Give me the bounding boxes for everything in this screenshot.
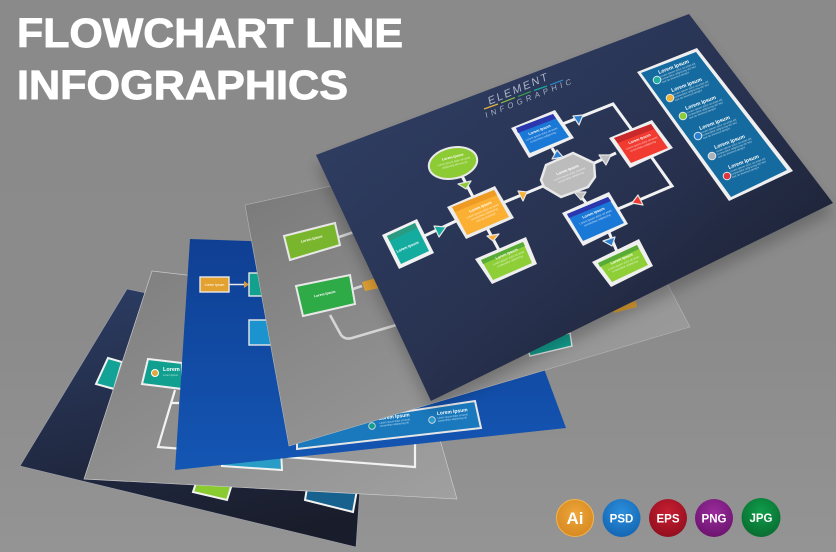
green box lower: Lorem Ipsum [314,290,336,298]
orange box [200,277,229,292]
node: hexagon: Lorem Ipsum [556,164,580,176]
node: blue box top: consectetur adipiscing [529,130,557,144]
node: green ellipse: Lorem ipsum dolor sit amet [437,155,471,167]
orange box: Lorem Ipsum [205,283,225,287]
sheet 4: grey [245,183,690,446]
icon: PSD: PSD [610,514,633,526]
icon: EPS: EPS [656,514,680,526]
node: orange box [447,186,514,239]
item 4 [694,113,739,140]
connector lines [330,230,420,339]
item 2: Lorem Ipsum [671,77,703,94]
item 4: Lorem ipsum dolor sit amet elit [700,117,737,134]
node: orange box: sed do eiusmod [475,211,496,223]
node: green box right: consectetur adipiscing [611,259,639,273]
icon: PSD [602,499,640,537]
info strip: Lorem Ipsum [379,412,411,422]
node: green box lower: Lorem ipsum dolor sit amet [492,250,525,267]
item 3 [679,93,725,120]
node: green ellipse: adipiscing elit sed do [442,160,468,170]
teal box [142,359,182,389]
item 1: sed do eiusmod tempor [661,70,690,84]
node: blue box top: Lorem Ipsum [528,124,552,136]
item 2: consectetur adipiscing elit sed [673,82,710,99]
node: hexagon: consectetur adipiscing [557,170,585,184]
icon: PNG: PNG [702,514,727,526]
format icons [556,498,780,537]
sheet 5: main dark flowchart [316,14,833,401]
item 6 [723,152,768,180]
sheet 3: blue [175,239,566,470]
node: teal box [382,219,434,269]
orange box right [612,301,637,313]
node: blue box lower: Lorem Ipsum [582,206,606,220]
node: red box: Lorem ipsum dolor sit amet [625,135,658,151]
item 6: consectetur adipiscing elit sed [730,159,767,176]
node: orange box: Lorem Ipsum [469,200,493,214]
teal box: Lorem [163,367,180,373]
node: green ellipse: Lorem Ipsum [442,152,464,162]
item 6: Lorem ipsum dolor sit amet elit [729,156,766,173]
logo: element infographic: INFOGRAPHIC [485,77,572,120]
node: hexagon: Lorem ipsum dolor sit amet [553,166,586,182]
icon: PNG [695,499,733,537]
node: blue box top: Lorem ipsum dolor sit amet [525,126,558,142]
light blue box [222,450,282,470]
icon: EPS [649,499,687,537]
title: INFOGRAPHICS [17,62,348,108]
item 5: Lorem Ipsum [714,134,746,151]
blue box [305,488,357,512]
item 2: Lorem ipsum dolor sit amet elit [672,79,709,96]
node: green box right: Lorem Ipsum [610,252,634,266]
icon: Ai [556,500,594,536]
item 1: consectetur adipiscing elit sed [660,64,697,81]
teal box [96,358,122,389]
node: green box lower [475,237,537,284]
arrow [229,281,249,288]
side panel [637,48,793,201]
item 4: consectetur adipiscing elit sed [701,120,738,137]
node: orange box: consectetur adipiscing [470,207,499,222]
item 3: sed do eiusmod tempor [688,106,717,120]
node: blue box lower: Lorem ipsum dolor sit amet [579,208,613,226]
title: FLOWCHART LINE [17,10,403,56]
node: blue box top [511,110,574,158]
node: red box [609,120,673,168]
info strip: consectetur adipiscing elit [437,415,467,423]
node: green box right [592,239,653,287]
blue box [249,320,271,345]
teal box [249,273,269,296]
green box top: Lorem Ipsum [301,234,323,244]
node: green box lower: Lorem Ipsum [495,247,519,261]
node: blue box lower [562,192,628,246]
item 6: sed do eiusmod tempor [731,165,760,179]
item 3: consectetur adipiscing elit sed [687,100,724,117]
sheet 1: dark navy [20,289,370,547]
item 4: sed do eiusmod tempor [702,126,731,140]
info strip: consectetur adipiscing elit [379,420,409,428]
item 5: sed do eiusmod tempor [717,145,746,159]
item 1: Lorem Ipsum [658,59,690,76]
green box [193,480,232,500]
sheet 5: main shadow [316,24,833,411]
node: teal box: Lorem Ipsum [396,240,420,254]
icon: JPG: JPG [749,513,773,525]
info strip: Lorem Ipsum [437,407,469,417]
item 1: Lorem ipsum dolor sit amet elit [659,61,696,78]
connector lines [420,104,672,254]
item 5: consectetur adipiscing elit sed [716,139,753,156]
item 2 [666,75,711,102]
teal box: Lorem ipsum [163,373,178,377]
node: green ellipse [426,143,480,183]
node: orange box: Lorem ipsum dolor sit amet [466,202,500,220]
item 1 [653,57,698,84]
item 3: Lorem Ipsum [685,95,717,112]
orange box [362,278,380,291]
node: red box: consectetur adipiscing [629,139,657,153]
item 5: Lorem ipsum dolor sit amet elit [715,136,752,153]
node: green box right: Lorem ipsum dolor sit amet [607,255,640,272]
teal box right [526,333,572,356]
item 6: Lorem Ipsum [728,154,760,171]
green box top [284,223,340,260]
info strip: Lorem ipsum dolor sit amet [379,417,410,425]
info strip: Lorem ipsum dolor sit amet [437,412,468,420]
item 2: sed do eiusmod tempor [674,88,703,102]
node: green box lower: consectetur adipiscing [496,254,524,268]
node: blue box lower: consectetur adipiscing [583,213,612,228]
node: red box: Lorem Ipsum [628,133,652,145]
arrows [434,115,643,246]
connector lines [158,390,415,467]
green box lower [296,275,355,316]
node: hexagon [541,153,595,197]
item 4: Lorem Ipsum [699,115,731,132]
icon: Ai: Ai [566,509,584,528]
sheet 2: grey [84,271,457,499]
logo: element infographic: ELEMENT [487,71,549,108]
title [17,10,403,108]
icon: JPG [742,498,780,537]
item 3: Lorem ipsum dolor sit amet elit [686,97,723,114]
item 5 [708,132,754,160]
info strip [297,401,481,449]
